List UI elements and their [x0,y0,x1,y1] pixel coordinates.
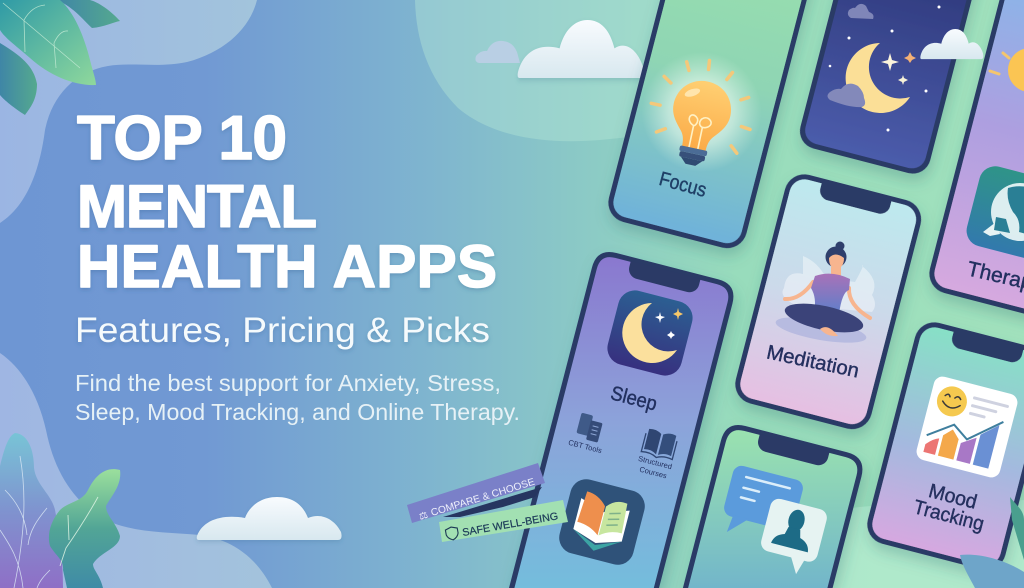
cloud: bottom centre [197,497,342,540]
phone: therapy [925,0,1024,324]
banner: safe well-being: SAFE WELL-BEING [461,510,559,539]
icon: sleep tile [604,287,696,379]
banner: compare and choose: ⚖ [418,510,429,523]
banner: compare and choose: COMPARE & CHOOSE [430,477,536,519]
label: mood tracking [911,480,986,536]
label: structured courses: Structured [637,454,673,471]
plants: bottom left [0,433,120,588]
phone: focus [604,0,817,253]
icon: stars [829,6,940,132]
phone: sleep [509,252,733,588]
icon: structured courses [641,428,678,462]
icon: therapy tile [963,163,1024,263]
blob: lower right [790,500,1024,588]
leaves: bottom right [960,497,1024,588]
phone: meditation [731,170,926,434]
blob: bottom left [0,353,272,588]
title: TOP 10 [77,104,287,173]
illustration: meditating figure [774,242,875,348]
icon: light bulb [630,41,773,183]
blob: top left [0,0,257,223]
label: cbt tools: CBT Tools [567,438,603,455]
banner: compare and choose [407,463,545,523]
label: sleep: Sleep [608,382,659,416]
label: structured courses: Courses [638,465,668,480]
title: HEALTH APPS [77,233,497,300]
phone: night moon [796,0,981,178]
label: mood tracking: Mood [926,480,979,514]
description: Find the best support for Anxiety, Stress, [75,370,501,396]
label: focus: Focus [657,168,709,202]
cloud: moon upper [848,4,874,19]
icon: chat bubble blue [718,464,805,548]
subtitle: Features, Pricing & Picks [75,311,490,350]
banner shadow [443,487,542,517]
label: structured courses [637,454,673,480]
cloud: top centre [518,20,644,78]
cloud: over phones [920,29,983,59]
blob: top right [415,0,700,141]
icon: sun [990,48,1024,92]
title: MENTAL [77,173,317,240]
icon: open book tile [556,476,648,568]
label: meditation: Meditation [765,341,861,383]
icon: crescent moon [846,43,910,113]
phone: mood tracking [863,318,1024,574]
icon: chat bubble person [755,497,829,578]
cloud: small back cloud [475,41,520,63]
icon: cbt tools [575,413,604,443]
icon: mood chart card [915,375,1019,479]
phone: chat [683,425,862,588]
description: Sleep, Mood Tracking, and Online Therapy. [75,399,520,425]
banner: safe well-being [439,500,568,542]
leaves: top left [0,0,120,115]
description [75,370,520,425]
cloud: moon lower left [828,84,865,107]
title [77,104,497,300]
label: mood tracking: Tracking [911,496,986,536]
